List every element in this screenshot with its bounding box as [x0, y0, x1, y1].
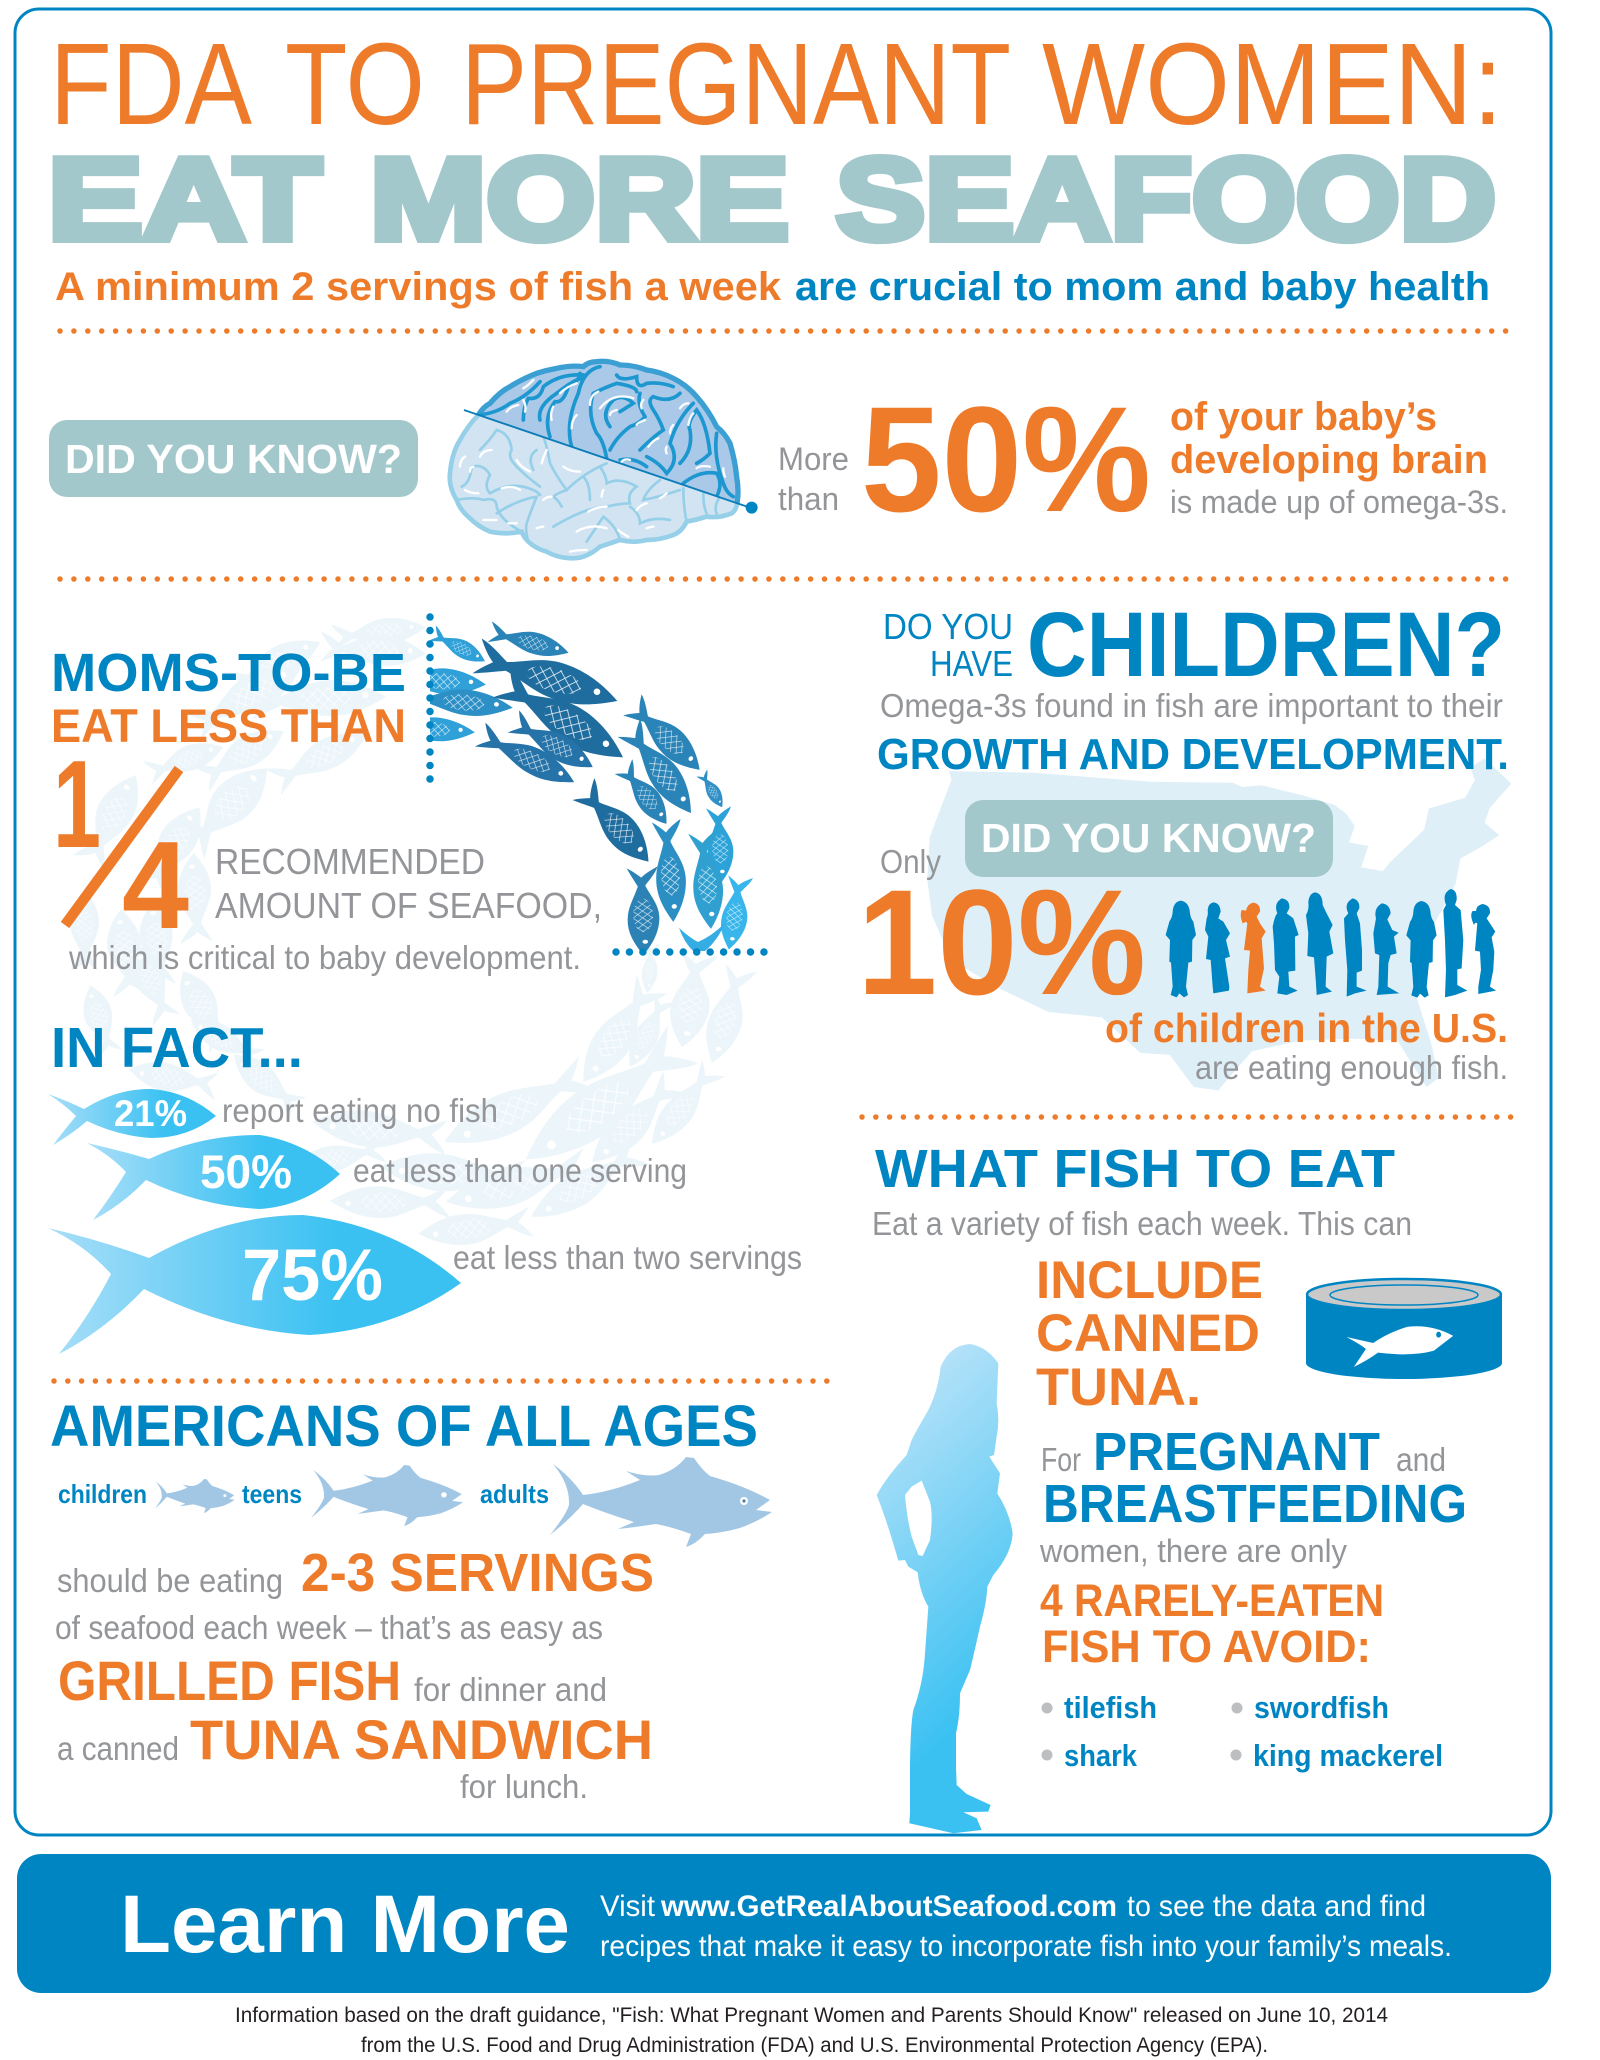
only 10 percent stat: 10% [857, 858, 1146, 1026]
servings text block: GRILLED FISH [58, 1649, 401, 1712]
learn more banner [17, 1854, 1551, 1993]
recommended amount text: RECOMMENDED [215, 841, 485, 882]
moms-to-be heading: EAT LESS THAN [51, 699, 406, 752]
title line 2 [48, 134, 1496, 264]
title [48, 19, 1503, 264]
icon: teen tuna [311, 1465, 463, 1526]
age group fish row: adults [480, 1479, 549, 1509]
list of fish to avoid: king mackerel [1253, 1738, 1443, 1773]
recommended amount text: which is critical to baby development. [68, 939, 581, 976]
fish stat 21 percent: 21% [114, 1093, 187, 1134]
title line 2: MORE [370, 134, 789, 264]
pregnant and breastfeeding text [1039, 1422, 1467, 1569]
servings text block: a canned [57, 1730, 179, 1767]
pregnant and breastfeeding text: For [1041, 1441, 1081, 1478]
servings text block: 2-3 SERVINGS [301, 1543, 654, 1603]
did you know pill 1: DID YOU KNOW? [65, 436, 402, 482]
omega-3 text: Omega-3s found in fish are important to their [880, 687, 1503, 724]
include canned tuna: TUNA. [1036, 1358, 1201, 1417]
fish stat 75 percent: 75% [242, 1235, 383, 1316]
icon: adult tuna [550, 1457, 772, 1547]
servings text block: TUNA SANDWICH [190, 1708, 653, 1771]
list of fish to avoid: swordfish [1254, 1690, 1389, 1725]
what fish to eat heading: WHAT FISH TO EAT [875, 1139, 1395, 1199]
include canned tuna: INCLUDE [1036, 1251, 1263, 1310]
fish stat 21 percent [48, 1089, 498, 1145]
fish stat 50 percent: 50% [200, 1145, 292, 1198]
title line 1: FDA [50, 19, 253, 149]
americans of all ages heading: AMERICANS OF ALL AGES [50, 1394, 758, 1459]
did you know pill 2: DID YOU KNOW? [981, 815, 1316, 861]
icon: brain [450, 361, 758, 558]
children eating enough fish text: of children in the U.S. [1105, 1005, 1508, 1051]
row of children silhouettes [1166, 889, 1496, 998]
stat: 50 percent brain: of your baby’s [1170, 395, 1437, 439]
children eating enough fish text [1105, 1005, 1508, 1086]
learn more banner: www.GetRealAboutSeafood.com [660, 1890, 1117, 1923]
list of fish to avoid: shark [1064, 1738, 1138, 1773]
title line 1: WOMEN: [1042, 19, 1503, 149]
eat a variety text: Eat a variety of fish each week. This can [872, 1205, 1412, 1242]
include canned tuna [1036, 1251, 1263, 1417]
fish to avoid heading: 4 RARELY-EATEN [1040, 1575, 1384, 1626]
servings text block: for lunch. [460, 1768, 588, 1805]
do you have children heading: CHILDREN? [1027, 594, 1505, 696]
children eating enough fish text: are eating enough fish. [1195, 1049, 1508, 1086]
subtitle: A minimum 2 servings of fish a week [55, 265, 782, 309]
brain pointer line [464, 410, 750, 508]
fraction one quarter: 1 [53, 736, 101, 874]
subtitle [55, 265, 1490, 309]
fish stat 50 percent [87, 1135, 687, 1220]
fish to avoid heading [1040, 1575, 1384, 1672]
map of united states [927, 758, 1511, 1091]
learn more banner: to see the data and find [1127, 1890, 1426, 1923]
recommended amount text: AMOUNT OF SEAFOOD, [215, 885, 602, 926]
icon: child tuna [155, 1479, 235, 1513]
title line 1: TO [285, 19, 425, 149]
moms-to-be heading [51, 643, 406, 752]
age group fish row: teens [242, 1479, 302, 1509]
source footnote: Information based on the draft guidance, "Fish: What Pregnant Women and Parents Should Know" released on June 10, 2014 [235, 2004, 1388, 2027]
stat: 50 percent brain [778, 375, 1508, 543]
pregnant and breastfeeding text: PREGNANT [1093, 1422, 1380, 1482]
learn more banner: Learn More [120, 1879, 570, 1970]
age group fish row: children [58, 1479, 147, 1509]
source footnote: from the U.S. Food and Drug Administration (FDA) and U.S. Environmental Protection Agency (EPA). [361, 2034, 1268, 2057]
fish to avoid heading: FISH TO AVOID: [1042, 1621, 1371, 1672]
stat: 50 percent brain: developing brain [1170, 438, 1488, 482]
title line 2: EAT [48, 134, 321, 264]
growth and development: GROWTH AND DEVELOPMENT. [877, 730, 1509, 779]
pregnant woman silhouette [877, 1344, 1013, 1833]
recommended amount text [68, 841, 602, 976]
did you know pill 1 [49, 420, 418, 497]
fish stat 21 percent: report eating no fish [222, 1092, 498, 1129]
list of fish to avoid [1042, 1690, 1443, 1773]
pregnant and breastfeeding text: women, there are only [1039, 1533, 1347, 1569]
title line 1 [50, 19, 1503, 149]
include canned tuna: CANNED [1036, 1304, 1260, 1363]
learn more banner: Visit [600, 1890, 656, 1923]
subtitle: are crucial to mom and baby health [795, 265, 1490, 309]
fraction one quarter [53, 736, 189, 955]
fish stat 50 percent: eat less than one serving [353, 1152, 687, 1189]
list of fish to avoid: tilefish [1064, 1690, 1157, 1725]
icon: tuna can [1306, 1279, 1502, 1379]
brain pointer dot [746, 502, 758, 514]
learn more banner: recipes that make it easy to incorporate fish into your family’s meals. [600, 1930, 1452, 1963]
in fact heading: IN FACT... [51, 1016, 303, 1080]
fish stat 75 percent: eat less than two servings [453, 1239, 802, 1276]
do you have children heading: HAVE [930, 643, 1013, 684]
pregnant and breastfeeding text: and [1396, 1441, 1446, 1478]
fraction one quarter: 4 [122, 817, 189, 955]
servings text block [55, 1543, 654, 1805]
servings text block: for dinner and [414, 1671, 607, 1708]
age group fish row [58, 1457, 772, 1547]
title line 1: PREGNANT [461, 19, 1011, 149]
servings text block: of seafood each week – that’s as easy as [55, 1609, 603, 1646]
do you have children heading: DO YOU [883, 606, 1013, 647]
pale fish ring [71, 613, 757, 1250]
fish stat 75 percent [48, 1215, 802, 1354]
title line 2: SEAFOOD [836, 134, 1496, 264]
stat: 50 percent brain: 50% [861, 375, 1151, 543]
servings text block: should be eating [57, 1562, 283, 1599]
source footnote [235, 2004, 1388, 2057]
stat: 50 percent brain: than [778, 481, 839, 517]
stat: 50 percent brain: More [778, 441, 849, 477]
stat: 50 percent brain: is made up of omega-3s. [1170, 484, 1508, 520]
pregnant and breastfeeding text: BREASTFEEDING [1043, 1474, 1467, 1534]
blue fish school [430, 622, 753, 951]
did you know pill 2 [965, 800, 1333, 877]
moms-to-be heading: MOMS-TO-BE [51, 643, 406, 703]
only 10 percent stat: Only [880, 843, 941, 880]
